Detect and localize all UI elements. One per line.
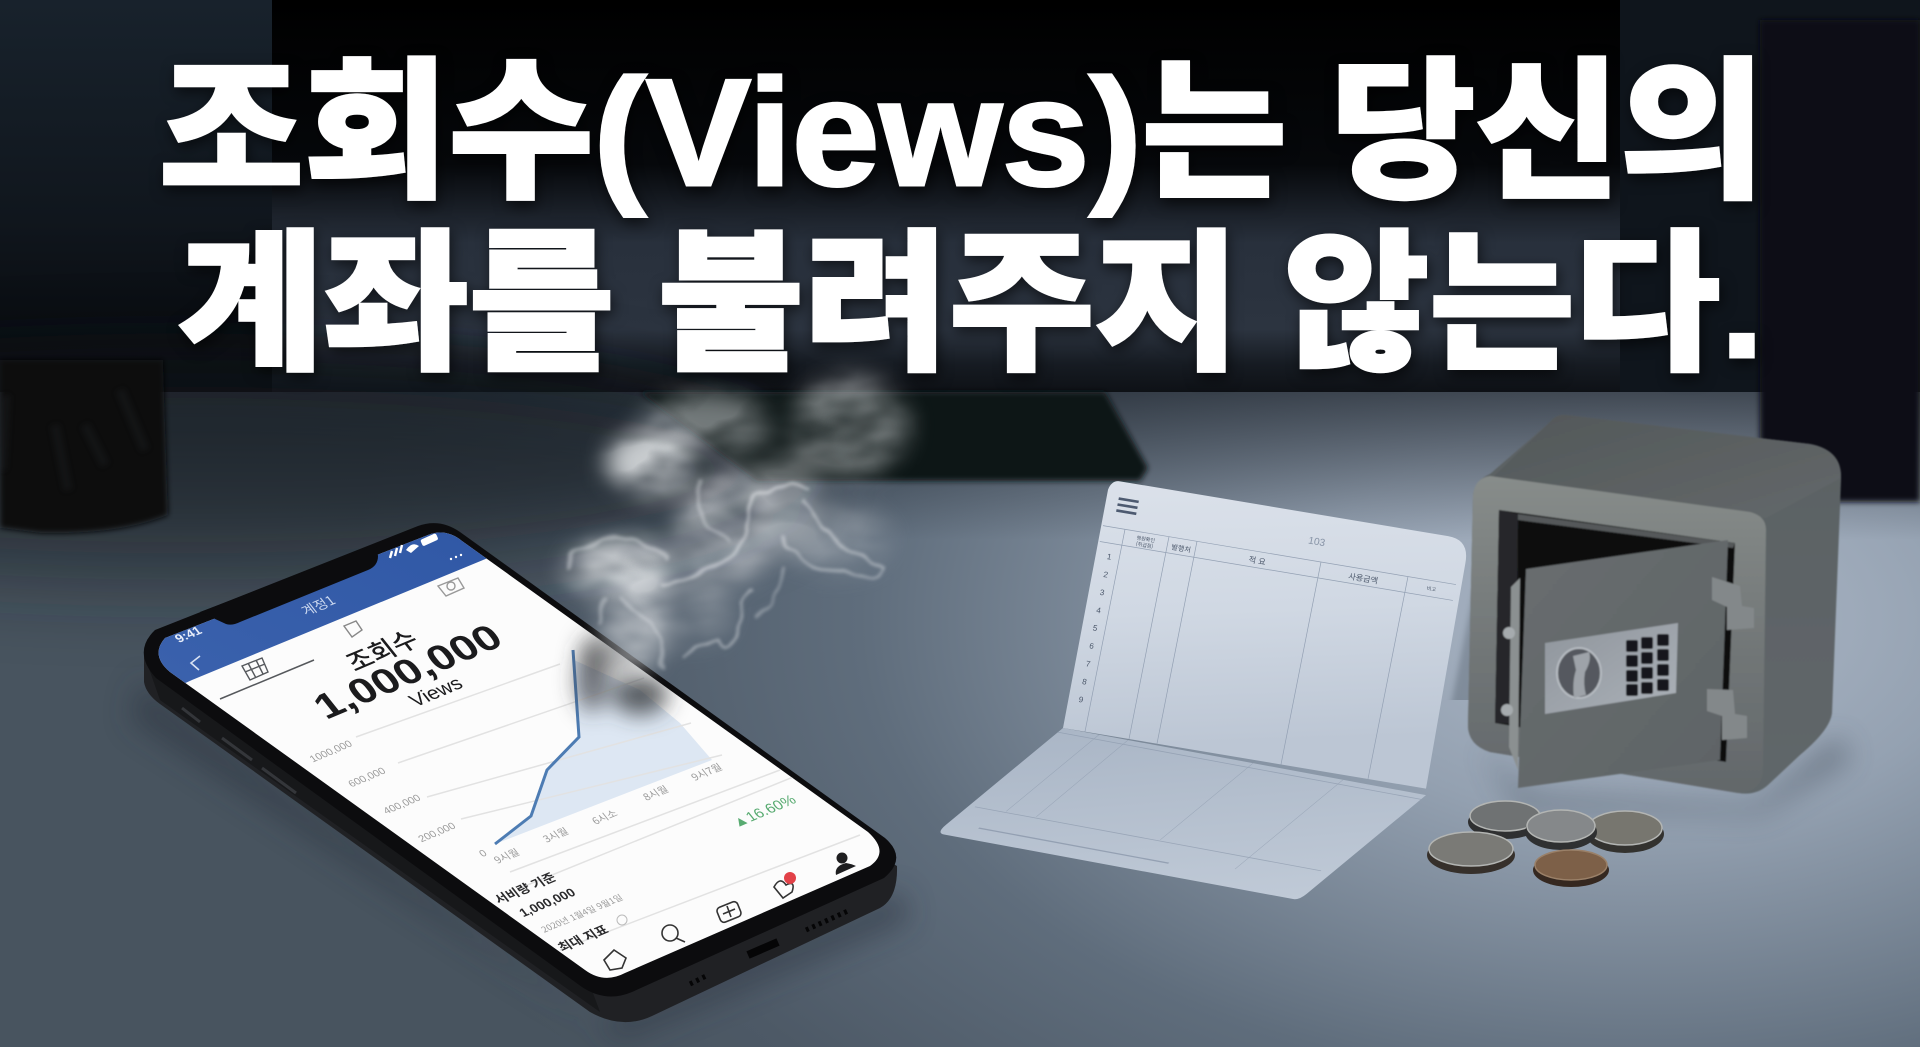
pencil cup <box>0 360 168 533</box>
person icon <box>836 852 856 875</box>
phone view count: 조회수 <box>337 621 426 678</box>
desk surface <box>0 360 1920 1047</box>
phone chart labels: 600,000 <box>347 766 388 790</box>
safe opening <box>1495 510 1735 762</box>
phone status bar text <box>172 533 462 670</box>
smoke haze <box>566 375 908 670</box>
phone chart labels <box>308 739 726 867</box>
passbook upper page: 2 <box>1103 570 1109 580</box>
speaker <box>1760 20 1920 502</box>
phone chart labels: 8시월 <box>640 783 672 804</box>
phone chart labels: 0 <box>477 849 490 859</box>
phone shadow <box>130 680 910 1040</box>
passbook upper page: 사용금액 <box>1347 571 1379 587</box>
blue header <box>158 532 486 683</box>
passbook <box>936 480 1490 925</box>
phone front <box>144 523 896 996</box>
safe shadow <box>1480 735 1850 815</box>
title <box>159 48 1765 390</box>
coins <box>1427 801 1664 887</box>
passbook upper page: 7 <box>1085 659 1092 669</box>
passbook upper page <box>1061 480 1475 789</box>
smoke wisps <box>570 480 883 663</box>
safe door <box>1501 540 1754 788</box>
chart line <box>495 650 579 844</box>
title line 1: 조회수(Views)는 당신의 <box>159 48 1765 218</box>
lock plate <box>1545 623 1678 714</box>
phone lower text: 서비량 기준 <box>489 868 560 907</box>
heart badge <box>784 872 796 884</box>
phone growth percentage: ▲16.60% <box>729 792 800 831</box>
smoke <box>566 375 908 670</box>
passbook lower page <box>936 728 1426 900</box>
phone lower text <box>489 868 626 955</box>
phone lower text: 1,000,000 <box>516 885 578 920</box>
phone notch <box>200 545 378 625</box>
passbook upper page: 3 <box>1099 588 1106 598</box>
chart grid lines <box>356 664 860 950</box>
passbook upper page: 행원확인 <box>1136 534 1156 544</box>
phone lower text: 2020년 1월4일 9월1일 <box>538 891 626 935</box>
phone side buttons <box>182 708 296 793</box>
phone lower text: 최대 지표 <box>553 920 612 955</box>
dark smoke over phone <box>576 632 668 715</box>
phone chart labels: 9시월 <box>491 846 523 867</box>
safe body <box>1468 415 1841 794</box>
phone status bar text: 계정1 <box>297 591 340 620</box>
bolts <box>1503 627 1515 639</box>
safe <box>1468 415 1841 794</box>
phone screen <box>158 532 880 978</box>
passbook upper page: 4 <box>1096 606 1102 615</box>
passbook upper page: 적 요 <box>1248 554 1267 568</box>
passbook upper page: 8 <box>1081 677 1088 687</box>
passbook upper page: 5 <box>1092 624 1099 633</box>
tab line <box>220 660 314 699</box>
passbook upper page: 9 <box>1078 695 1085 705</box>
hinges <box>1707 577 1754 740</box>
phone chart labels: 9시7월 <box>688 760 726 784</box>
monitor stand <box>640 392 1148 481</box>
safe front rim <box>1468 476 1766 793</box>
phone chart labels: 6시소 <box>589 806 621 828</box>
phone status bar text: 9:41 <box>172 623 205 645</box>
passbook shadow <box>936 560 1490 925</box>
passbook upper page: (취급점) <box>1135 541 1154 550</box>
passbook upper page: 6 <box>1088 641 1095 651</box>
passbook upper page: 103 <box>1307 536 1326 549</box>
phone bottom nav icons <box>604 881 793 970</box>
phone top icons <box>242 578 464 680</box>
title line 2: 계좌를 불려주지 않는다. <box>178 220 1764 390</box>
phone speaker grilles <box>690 910 850 984</box>
keypad <box>1626 634 1669 696</box>
phone <box>130 510 910 1040</box>
background wall <box>0 0 1920 400</box>
phone chart labels: 3시월 <box>540 825 572 846</box>
safe top <box>1492 415 1841 518</box>
chart area <box>495 660 712 844</box>
phone chart labels: 400,000 <box>382 793 423 817</box>
phone chart labels: 1000,000 <box>308 739 355 765</box>
passbook upper page: 발행처 <box>1170 542 1192 555</box>
phone chart labels: 200,000 <box>417 821 458 845</box>
passbook upper page: 비고 <box>1426 585 1437 593</box>
phone body <box>144 600 897 1022</box>
phone view count: 1,000,000 <box>305 617 511 727</box>
passbook upper page: 1 <box>1106 552 1113 562</box>
phone view count: Views <box>405 673 467 711</box>
